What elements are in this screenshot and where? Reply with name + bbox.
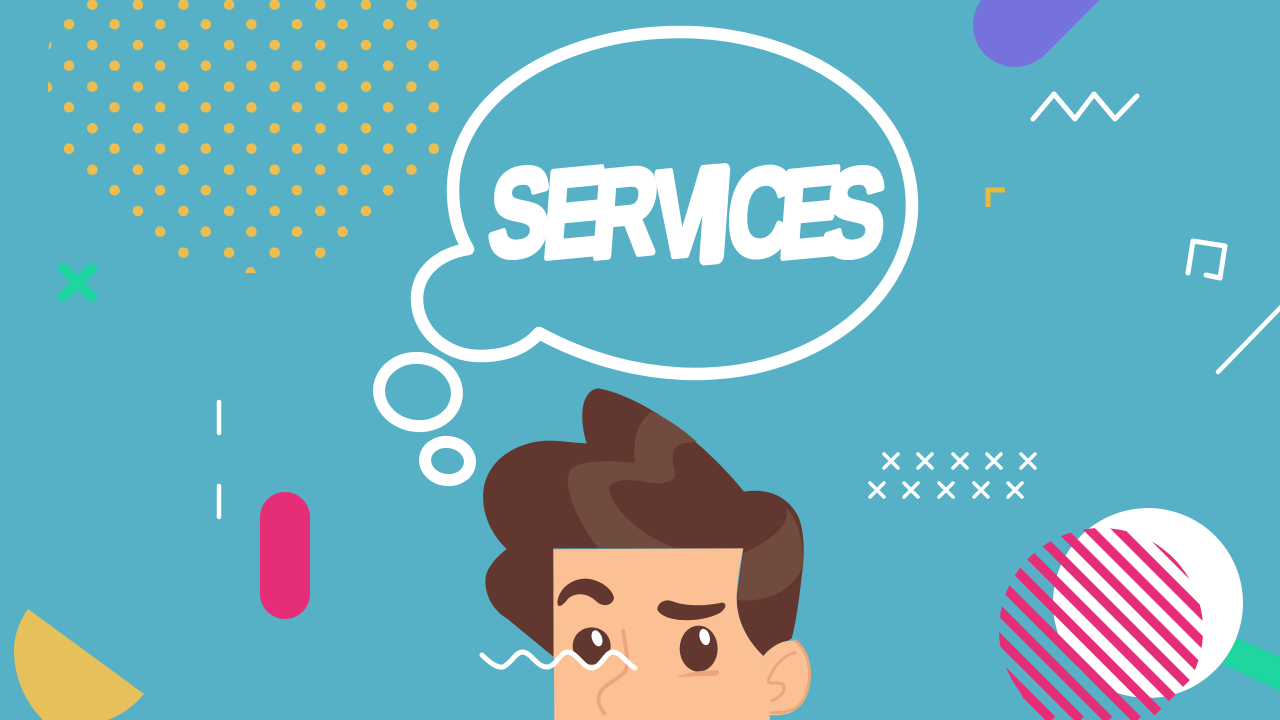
white wavy line [482, 652, 635, 668]
icon: striped pink circle [999, 528, 1203, 720]
icon: green cross [63, 268, 92, 297]
icon: open square [1188, 241, 1225, 278]
right eye highlight [698, 628, 712, 646]
icon: white zigzag [1033, 94, 1137, 119]
icon: white crosses [870, 454, 1035, 497]
thought bubble [375, 32, 912, 483]
hair [483, 388, 804, 657]
ear [763, 641, 810, 715]
left eyebrow [557, 579, 614, 606]
face [553, 548, 770, 720]
ear rim and inner lines [768, 641, 809, 713]
left eye [573, 627, 611, 665]
hair highlights [568, 412, 803, 601]
icon: vertical dashes [217, 402, 221, 517]
icon: yellow half circle [14, 609, 144, 720]
right eyebrow [657, 600, 725, 620]
bubble tiny circle [423, 439, 472, 483]
right eye [680, 626, 718, 672]
nose [598, 631, 627, 713]
icon: white circle [1053, 508, 1243, 698]
character head [483, 388, 810, 720]
bubble small circle [375, 353, 461, 431]
icon: green band [1223, 638, 1280, 691]
left eye highlight [589, 629, 605, 648]
icon: diagonal line [1218, 306, 1280, 372]
under-eye line [677, 670, 719, 677]
bubble outline [417, 32, 912, 374]
icon: pink pill [260, 492, 310, 619]
dotted half-circle pattern [48, 5, 434, 273]
icon: purple pill [1015, 0, 1090, 25]
heading: SERVICES: SERVICES [478, 141, 897, 285]
icon: yellow corner [988, 190, 1005, 207]
